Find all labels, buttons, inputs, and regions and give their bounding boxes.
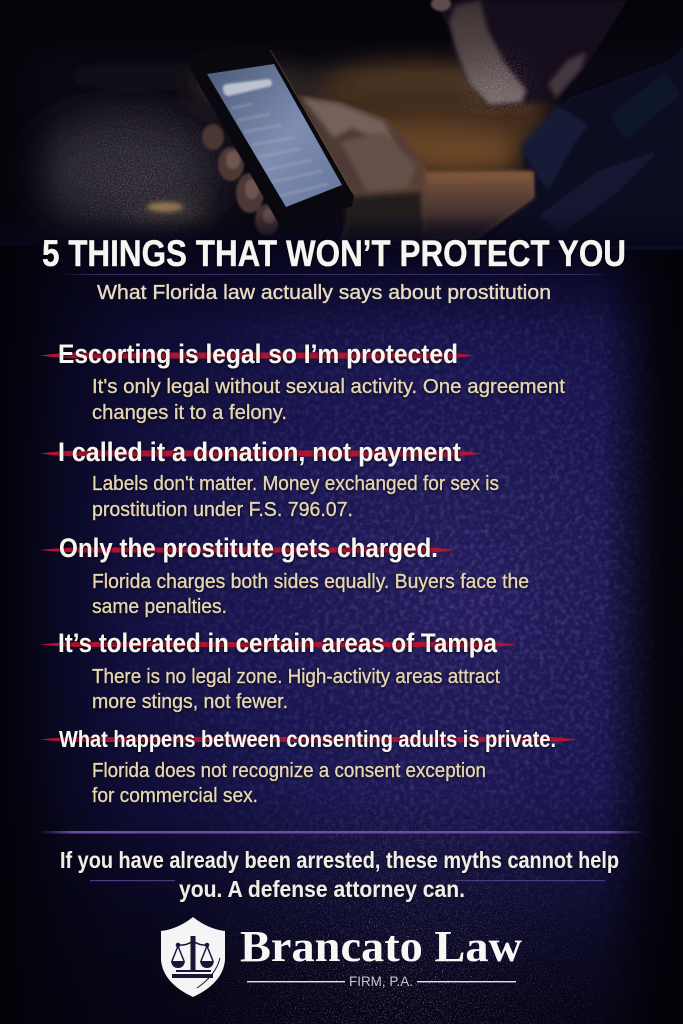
myth heading 5: What happens between consenting adults is private.: [59, 726, 556, 752]
myth body 3: Florida charges both sides equally. Buyers face the: [92, 571, 529, 593]
call to action rule right: [455, 880, 605, 881]
strikethrough 3: [40, 548, 455, 552]
man's beard and neck: [431, 0, 628, 115]
call to action rule left: [90, 880, 175, 881]
myth body 1: changes it to a felony.: [92, 402, 287, 424]
myth heading 3: Only the prostitute gets charged.: [59, 533, 438, 563]
phone: [189, 43, 354, 232]
strikethrough 1: [40, 352, 474, 358]
fingers: [202, 124, 279, 236]
subtitle: What Florida law actually says about prostitution: [97, 282, 551, 304]
screen text rows: [232, 104, 328, 196]
title underline: [60, 274, 610, 275]
wordmark: Brancato Law: [240, 922, 522, 971]
logo: Brancato Law: [161, 917, 522, 997]
myth body 2: prostitution under F.S. 796.07.: [92, 499, 353, 521]
myth body 1: It's only legal without sexual activity. One agreement: [92, 376, 565, 398]
jacket and collar: [476, 30, 683, 250]
wordmark rule right: [417, 981, 516, 982]
fade into background: [0, 214, 683, 246]
myth 3: [40, 533, 529, 618]
myth 5: [40, 726, 578, 807]
myth heading 2: I called it a donation, not payment: [58, 437, 461, 467]
myth body 5: for commercial sex.: [92, 785, 258, 807]
strikethrough 4: [40, 642, 517, 647]
myth body 5: Florida does not recognize a consent exception: [92, 760, 486, 782]
myth heading 4: It’s tolerated in certain areas of Tampa: [58, 628, 497, 658]
hand and wrist: [298, 95, 534, 245]
myth body 3: same penalties.: [92, 596, 227, 618]
call to action: [60, 847, 619, 902]
icon: shield with scales: [161, 917, 225, 997]
photo backdrop: blurred road: [28, 0, 634, 239]
firm tagline: FIRM, P.A.: [349, 974, 413, 989]
myth 1: [40, 339, 565, 424]
myth 4: [40, 628, 517, 713]
myth 2: [40, 437, 499, 521]
myth body 4: There is no legal zone. High-activity areas attract: [92, 666, 500, 688]
strikethrough 2: [40, 450, 482, 456]
divider: [38, 831, 645, 834]
call to action: you. A defense attorney can.: [179, 876, 465, 902]
myth body 2: Labels don't matter. Money exchanged for sex is: [92, 473, 499, 495]
photo: man looking at phone: [0, 0, 683, 250]
strikethrough 5: [40, 737, 578, 742]
background: [36, 246, 654, 1024]
myth heading 1: Escorting is legal so I’m protected: [58, 339, 458, 369]
wordmark rule left: [247, 981, 345, 982]
myth body 4: more stings, not fewer.: [92, 691, 288, 713]
